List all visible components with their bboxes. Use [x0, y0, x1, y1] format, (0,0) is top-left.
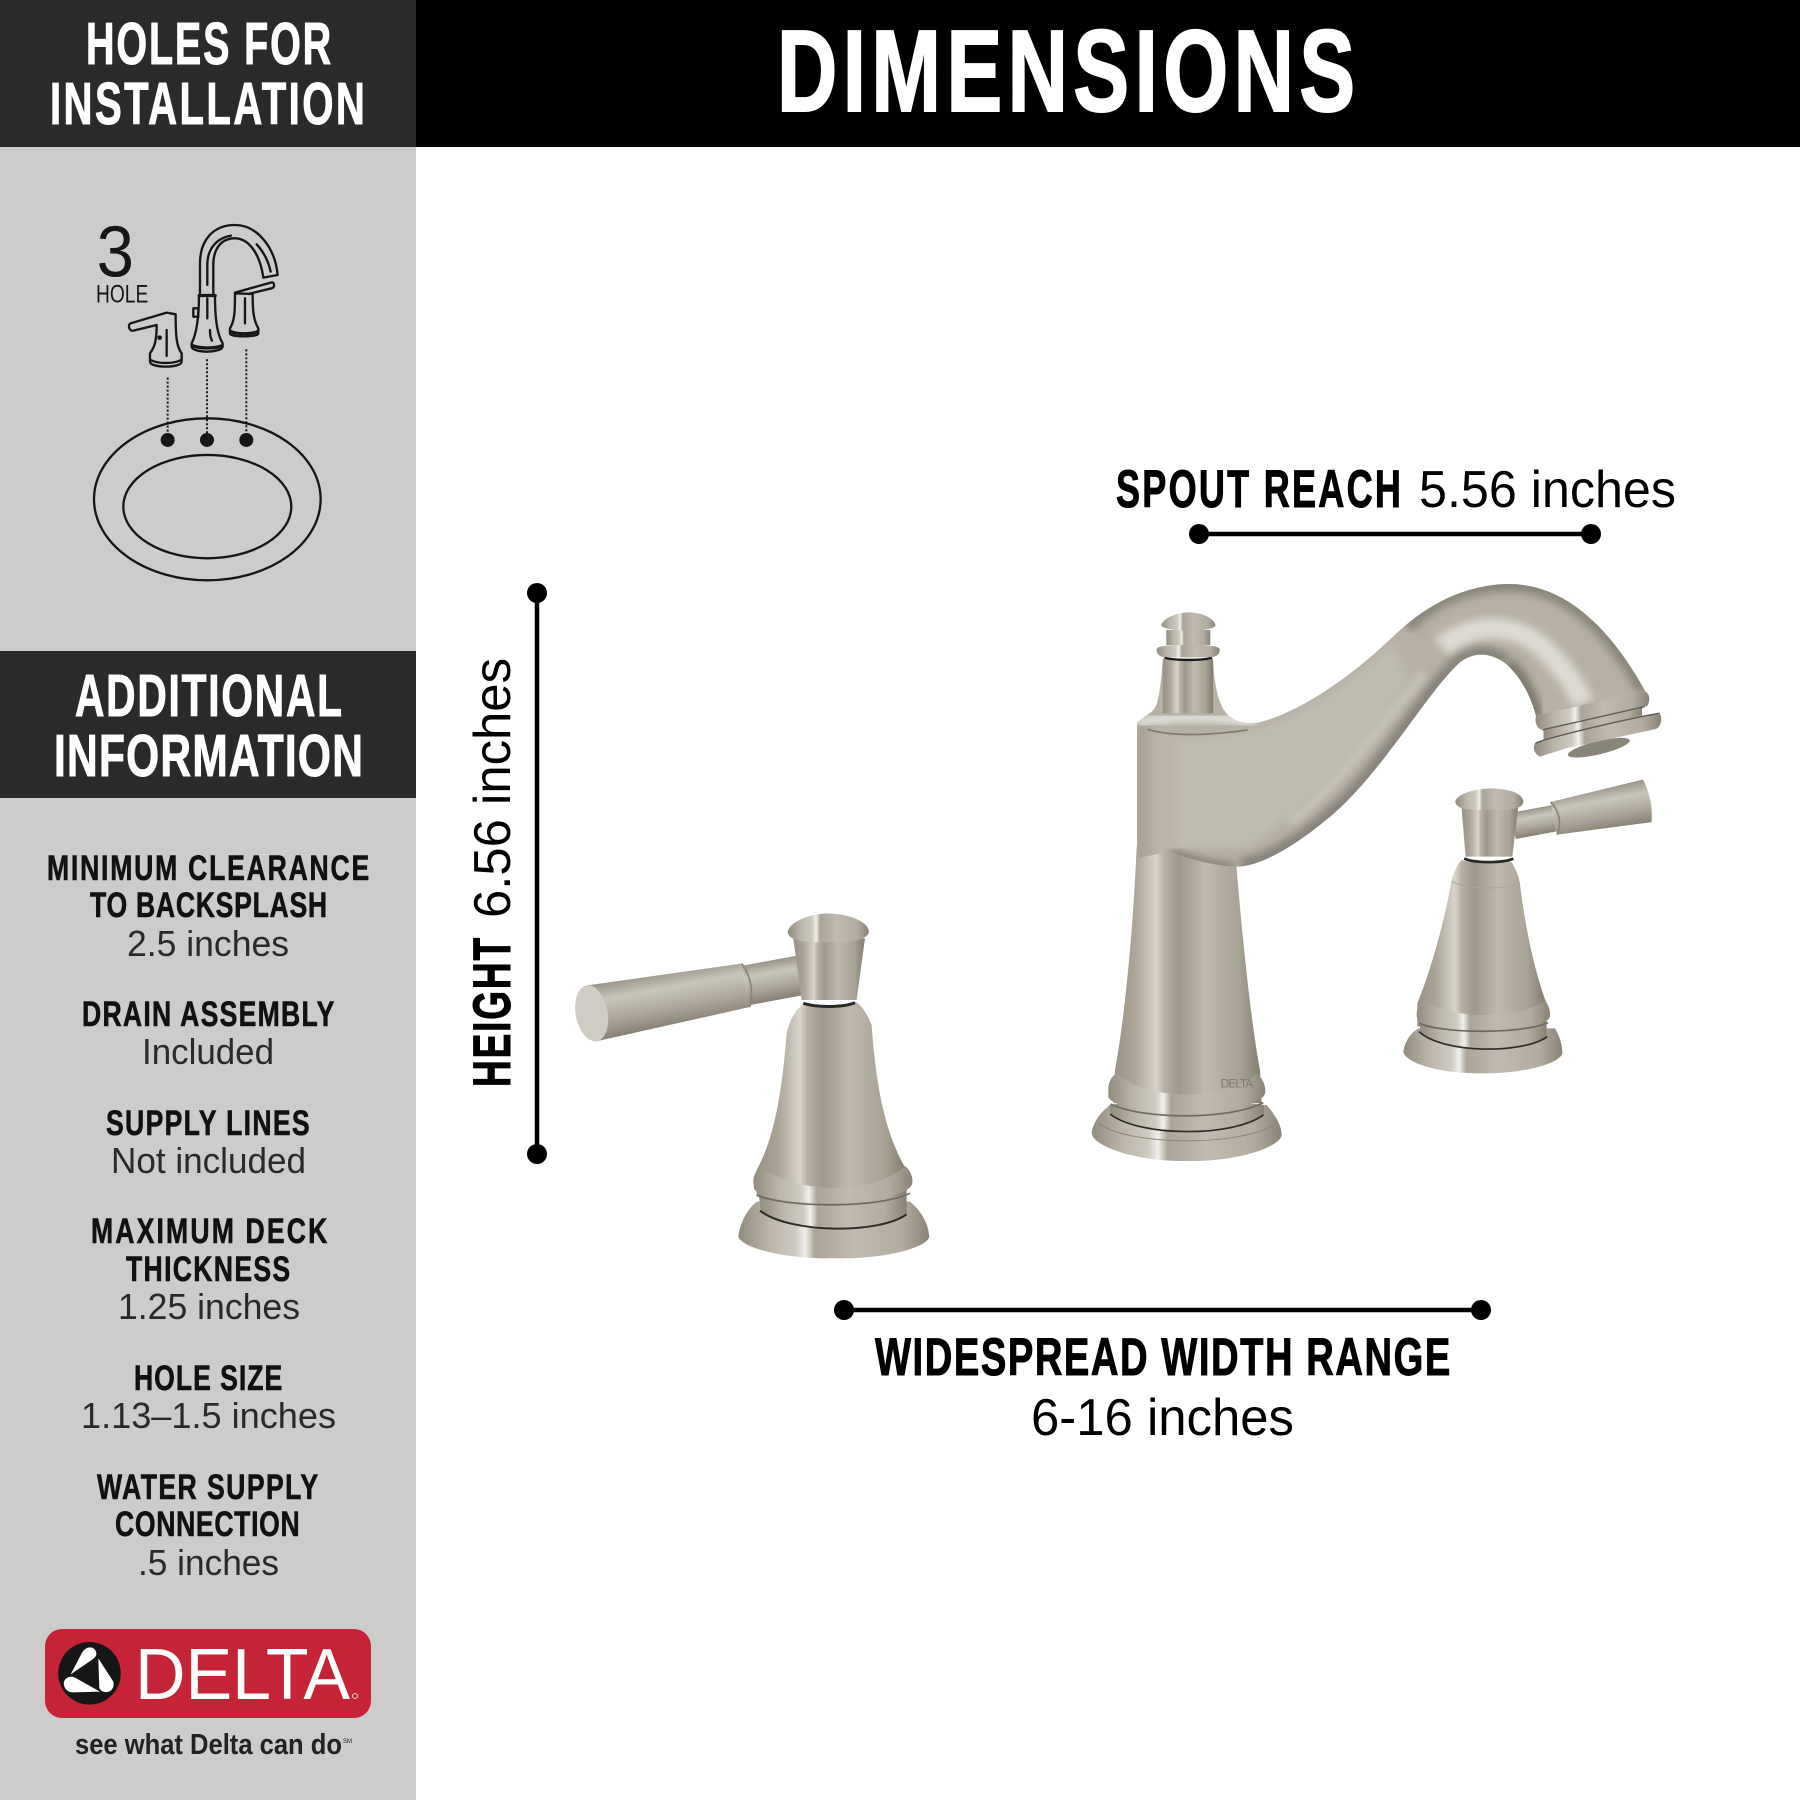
spec list: water supply connection: WATER SUPPLY — [97, 1467, 318, 1507]
logo: delta — [45, 1629, 371, 1761]
heading band: additional information: INFORMATION — [54, 722, 363, 789]
right handle flange — [1403, 1028, 1562, 1073]
right handle upper ring — [1417, 999, 1550, 1032]
aerator — [1566, 734, 1631, 762]
heading band: holes for installation: HOLES FOR — [86, 11, 331, 77]
spec list: drain assembly — [82, 994, 335, 1072]
faucet: left handle — [571, 913, 929, 1258]
spec list: minimum clearance: TO BACKSPLASH — [90, 885, 327, 925]
dimension: widespread width range: WIDESPREAD WIDTH RANGE — [875, 1327, 1450, 1386]
spec list: maximum deck thickness: 1.25 inches — [118, 1286, 300, 1327]
spec list: hole size: HOLE SIZE — [134, 1358, 282, 1398]
faucet logo text: DELTA — [1221, 1076, 1253, 1090]
finial collar — [1157, 645, 1220, 657]
faucet: center spout upper body — [1130, 580, 1661, 880]
right handle lower ring — [1420, 1023, 1547, 1050]
faucet: center spout lower stem and base — [1092, 847, 1562, 1161]
spec list: maximum deck thickness — [91, 1211, 328, 1327]
spec list: minimum clearance: MINIMUM CLEARANCE — [47, 848, 369, 888]
panel: left sidebar background — [0, 0, 416, 1800]
title band: dimensions — [416, 0, 1800, 147]
title band: dimensions: DIMENSIONS — [777, 8, 1355, 136]
dimension: widespread width range — [834, 1300, 1491, 1447]
left handle collar — [793, 938, 865, 1000]
heading band: holes for installation: INSTALLATION — [50, 70, 365, 137]
spec list: water supply connection: CONNECTION — [115, 1504, 300, 1544]
right handle bell — [1417, 860, 1547, 1027]
dimension: widespread width range: 6-16 inches — [1031, 1389, 1294, 1447]
heading band: holes for installation — [0, 0, 416, 147]
spec list: supply lines — [106, 1103, 310, 1181]
spec list: maximum deck thickness: MAXIMUM DECK — [91, 1211, 328, 1251]
spec list: hole size: 1.13–1.5 inches — [81, 1395, 336, 1436]
dimension: height: 6.56 inches — [464, 658, 522, 918]
left handle lower ring — [759, 1197, 907, 1229]
faucet stem — [1113, 847, 1262, 1103]
icon: 3 hole faucet and sink line art — [94, 212, 321, 580]
spout head collar — [1536, 692, 1649, 729]
left handle lever — [571, 944, 818, 1044]
right handle collar — [1461, 807, 1518, 857]
left handle bell — [757, 1002, 907, 1197]
left handle cap — [788, 913, 869, 942]
spec list: supply lines: SUPPLY LINES — [106, 1103, 310, 1143]
spec list: hole size — [81, 1358, 336, 1436]
heading band: additional information — [0, 651, 416, 798]
icon: 3 hole faucet and sink line art: HOLE — [96, 282, 148, 309]
icon: 3 hole faucet and sink line art: 3 — [97, 212, 134, 293]
dimension: height — [462, 583, 547, 1164]
spec list: maximum deck thickness: THICKNESS — [126, 1249, 290, 1289]
logo: delta: DELTA — [135, 1635, 350, 1715]
finial knob — [1161, 612, 1215, 631]
spec list: water supply connection: .5 inches — [138, 1542, 279, 1583]
right handle cap — [1455, 788, 1523, 810]
spec list: minimum clearance — [47, 848, 369, 964]
base upper ring — [1108, 1073, 1265, 1111]
dimension: height: HEIGHT — [462, 938, 522, 1087]
base middle ring — [1109, 1101, 1264, 1131]
heading band: additional information: ADDITIONAL — [75, 662, 342, 729]
dimension: spout reach: SPOUT REACH — [1116, 459, 1401, 519]
spec list: supply lines: Not included — [111, 1140, 306, 1181]
spec list: drain assembly: DRAIN ASSEMBLY — [82, 994, 335, 1034]
logo: delta: see what Delta can do — [75, 1729, 342, 1761]
dimension: spout reach — [1116, 459, 1676, 544]
spout head flange — [1534, 713, 1661, 757]
base flange — [1092, 1105, 1282, 1161]
dimension: spout reach: 5.56 inches — [1419, 461, 1676, 519]
left handle upper ring — [753, 1166, 912, 1203]
spec list: drain assembly: Included — [142, 1031, 274, 1072]
spec list: water supply connection — [97, 1467, 318, 1583]
spout body — [1130, 580, 1649, 880]
left handle flange — [738, 1202, 929, 1258]
logo: delta: SM — [343, 1739, 352, 1745]
spec list: minimum clearance: 2.5 inches — [127, 923, 289, 964]
right handle lever — [1509, 779, 1655, 847]
spout head mid ring — [1543, 706, 1642, 743]
